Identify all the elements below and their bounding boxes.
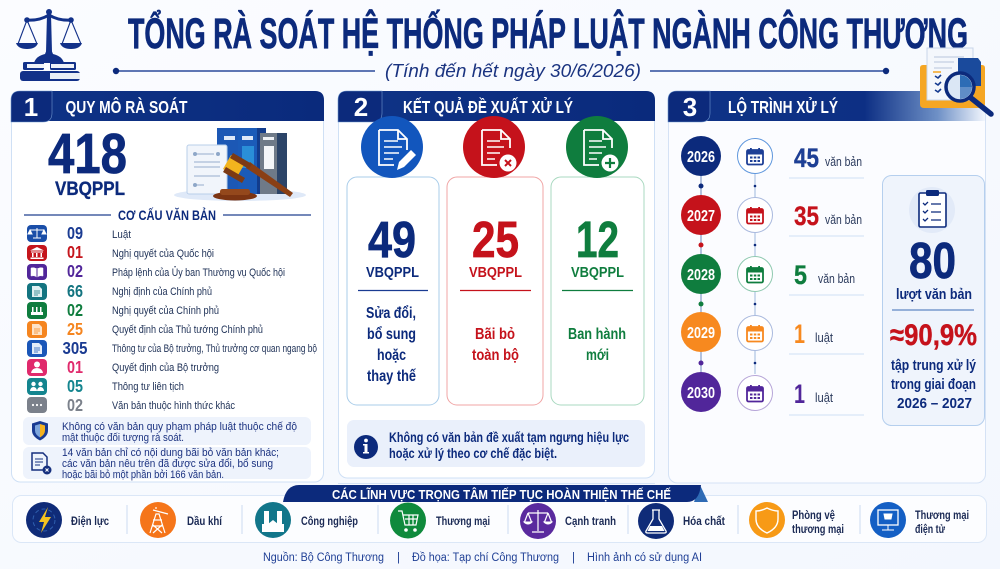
milestone 2029: luật xyxy=(815,331,833,345)
milestone 2030 xyxy=(681,372,864,415)
row: Thông tư của Bộ trưởng: 305 xyxy=(62,338,88,358)
item: trade xyxy=(390,502,490,538)
card: new: Ban hành xyxy=(568,326,626,343)
row: Văn bản khác: 02 xyxy=(67,395,83,415)
note: classified documents xyxy=(23,417,311,445)
card: repeal: VBQPPL xyxy=(469,264,522,281)
summary box: ≈90,9% xyxy=(890,319,977,352)
card: amend: 49 xyxy=(368,211,416,268)
row: Quyết định Thủ tướng: 25 xyxy=(67,319,83,339)
panel 3 heading: LỘ TRÌNH XỬ LÝ xyxy=(728,96,838,117)
milestone 2027: 35 xyxy=(794,201,819,231)
milestone 2028: 5 xyxy=(794,260,807,290)
milestone 2027: 2027 xyxy=(687,208,715,225)
footer source line: Nguồn: Bộ Công Thương xyxy=(263,552,384,564)
icon: document with cross xyxy=(463,116,525,178)
row: Pháp lệnh: 02 xyxy=(67,261,83,281)
timeline connectors xyxy=(698,174,756,374)
panel 1 number tab: 1 xyxy=(24,92,38,122)
milestone 2026 xyxy=(681,136,864,178)
note: no suspension proposed xyxy=(347,420,645,467)
focus areas strip xyxy=(12,485,986,542)
panel 3 number tab: 3 xyxy=(683,92,697,122)
subtitle xyxy=(113,60,889,81)
note: repeal-only documents: 14 văn bản chỉ có nội dung bãi bỏ văn bản khác; xyxy=(62,447,279,459)
card: new: 12 xyxy=(576,211,619,268)
icon: document with plus xyxy=(566,116,628,178)
item: oil and gas: Dầu khí xyxy=(187,514,223,528)
row: Luật xyxy=(27,223,131,243)
row: Nghị quyết của Chính phủ: 02 xyxy=(67,300,83,320)
row: Quyết định của Bộ trưởng: Quyết định của Bộ trưởng xyxy=(112,362,219,374)
item: industry: Công nghiệp xyxy=(301,514,358,528)
item: trade: Thương mại xyxy=(436,514,490,528)
row: Thông tư liên tịch: 05 xyxy=(67,376,83,396)
panel 1: scope of review xyxy=(11,91,324,482)
milestone 2028 xyxy=(681,254,864,295)
item: chemicals xyxy=(638,503,725,539)
row: Thông tư của Bộ trưởng xyxy=(27,338,317,358)
card: amend: hoặc xyxy=(377,347,406,364)
row: Thông tư của Bộ trưởng: Thông tư của Bộ trưởng, Thủ trưởng cơ quan ngang bộ xyxy=(112,343,317,355)
logo: scales of justice on books xyxy=(16,9,82,81)
milestone 2027: văn bản xyxy=(825,213,862,227)
row: Quyết định của Bộ trưởng: 01 xyxy=(67,357,83,377)
row: Quyết định Thủ tướng: Quyết định của Thủ tướng Chính phủ xyxy=(112,324,263,336)
item: e-commerce: Thương mại xyxy=(915,508,969,522)
item: chemicals: Hóa chất xyxy=(683,514,725,528)
milestone 2026: văn bản xyxy=(825,155,862,169)
milestone 2028: văn bản xyxy=(818,272,855,286)
footer source line: | xyxy=(572,552,575,564)
milestone 2029: 2029 xyxy=(687,325,715,342)
panel 2 number tab: 2 xyxy=(354,92,368,122)
row: Quyết định của Bộ trưởng xyxy=(27,357,219,377)
ribbon heading: CÁC LĨNH VỰC TRỌNG TÂM TIẾP TỤC HOÀN THIỆN THẾ CHẾ xyxy=(332,487,671,502)
row: Nghị định: Nghị định của Chính phủ xyxy=(112,286,212,298)
row: Quyết định Thủ tướng xyxy=(27,319,263,339)
note: repeal-only documents xyxy=(23,447,311,481)
note: classified documents: Không có văn bản quy phạm pháp luật thuộc chế độ xyxy=(62,421,297,433)
panel 2 heading: KẾT QUẢ ĐỀ XUẤT XỬ LÝ xyxy=(403,96,573,117)
card: amend: bổ sung xyxy=(367,325,416,343)
row: Pháp lệnh: Pháp lệnh của Ủy ban Thường vụ Quốc hội xyxy=(112,266,285,279)
footer source line xyxy=(263,552,702,564)
row: Thông tư liên tịch xyxy=(27,376,184,396)
milestone 2030: luật xyxy=(815,391,833,405)
card: amend: VBQPPL xyxy=(366,264,419,281)
card: repeal: 25 xyxy=(472,211,519,268)
note: repeal-only documents: các văn bản nêu trên đã được sửa đổi, bổ sung xyxy=(62,458,273,470)
note: classified documents: mật thuộc đối tượng rà soát. xyxy=(62,432,184,444)
item: oil and gas xyxy=(140,502,223,538)
item: electricity xyxy=(26,502,109,538)
card: repeal: Bãi bỏ xyxy=(475,326,515,343)
panel 1 number tab xyxy=(11,91,52,122)
icon: clipboard checklist xyxy=(909,187,955,233)
row: Nghị định: 66 xyxy=(67,281,83,301)
panel 3 number tab xyxy=(668,91,710,122)
card: repeal xyxy=(447,116,543,405)
milestone 2030: 1 xyxy=(794,379,805,409)
panel 2: proposed results xyxy=(338,91,655,484)
card: amend: Sửa đổi, xyxy=(366,304,416,322)
row: Nghị quyết của Quốc hội: Nghị quyết của Quốc hội xyxy=(112,248,214,260)
row: Văn bản khác xyxy=(27,395,236,415)
milestone 2026: 2026 xyxy=(687,149,715,166)
item: trade defence: Phòng vệ xyxy=(792,508,835,522)
icon: document with pencil xyxy=(361,116,423,178)
row: Pháp lệnh xyxy=(27,261,285,281)
item: e-commerce xyxy=(870,502,969,538)
card: new: mới xyxy=(586,347,609,364)
milestone 2028: 2028 xyxy=(687,267,715,284)
summary box xyxy=(882,176,984,426)
milestone 2027 xyxy=(681,195,864,236)
total number 418: VBQPPL xyxy=(55,179,125,200)
row: Thông tư liên tịch: Thông tư liên tịch xyxy=(112,381,184,393)
row: Nghị quyết của Quốc hội xyxy=(27,242,214,262)
row: Nghị định xyxy=(27,281,212,301)
item: competition xyxy=(520,503,616,539)
icon: folder and magnifier xyxy=(920,48,991,114)
milestone 2030: 2030 xyxy=(687,385,715,402)
summary box: 80 xyxy=(909,232,956,289)
card: new xyxy=(551,116,644,405)
row: Luật: Luật xyxy=(112,229,131,241)
total number 418: 418 xyxy=(48,122,127,186)
footer source line: Đồ họa: Tạp chí Công Thương xyxy=(412,552,559,564)
structure heading: CƠ CẤU VĂN BẢN xyxy=(118,208,216,223)
card: amend: thay thế xyxy=(367,368,416,385)
subtitle: (Tính đến hết ngày 30/6/2026) xyxy=(385,60,641,81)
footer source line: | xyxy=(397,552,400,564)
item: e-commerce: điện tử xyxy=(915,522,945,536)
note: no suspension proposed: Không có văn bản đề xuất tạm ngưng hiệu lực xyxy=(389,430,629,445)
icon: info xyxy=(354,435,378,459)
row: Luật: 09 xyxy=(67,223,83,243)
summary box: lượt văn bản xyxy=(896,286,972,303)
panel 1 heading: QUY MÔ RÀ SOÁT xyxy=(66,96,188,117)
card: repeal: toàn bộ xyxy=(472,347,519,364)
card: new: VBQPPL xyxy=(571,264,624,281)
milestone 2026: 45 xyxy=(794,143,819,173)
illustration: binders, document and gavel xyxy=(174,128,306,201)
milestone 2029: 1 xyxy=(794,319,805,349)
note: no suspension proposed: hoặc xử lý theo cơ chế đặc biệt. xyxy=(389,446,557,461)
row: Nghị quyết của Chính phủ xyxy=(27,300,219,320)
summary box: tập trung xử lý xyxy=(891,358,976,374)
panel 3: roadmap xyxy=(668,91,986,483)
panel 2 number tab xyxy=(338,91,382,122)
item: competition: Cạnh tranh xyxy=(565,514,616,528)
note: repeal-only documents: hoặc bãi bỏ một phần bởi 166 văn bản. xyxy=(62,469,224,481)
row: Nghị quyết của Chính phủ: Nghị quyết của Chính phủ xyxy=(112,305,219,317)
row: Nghị quyết của Quốc hội: 01 xyxy=(67,242,83,262)
summary box: 2026 – 2027 xyxy=(897,396,972,412)
row: Văn bản khác: Văn bản thuộc hình thức khác xyxy=(112,400,236,412)
summary box: trong giai đoạn xyxy=(891,377,976,393)
item: industry xyxy=(255,502,358,538)
item: trade defence xyxy=(749,502,844,538)
footer source line: Hình ảnh có sử dụng AI xyxy=(587,552,702,564)
card: amend xyxy=(347,116,439,405)
milestone 2029 xyxy=(681,312,864,354)
item: trade defence: thương mại xyxy=(792,522,844,536)
item: electricity: Điện lực xyxy=(71,514,109,528)
